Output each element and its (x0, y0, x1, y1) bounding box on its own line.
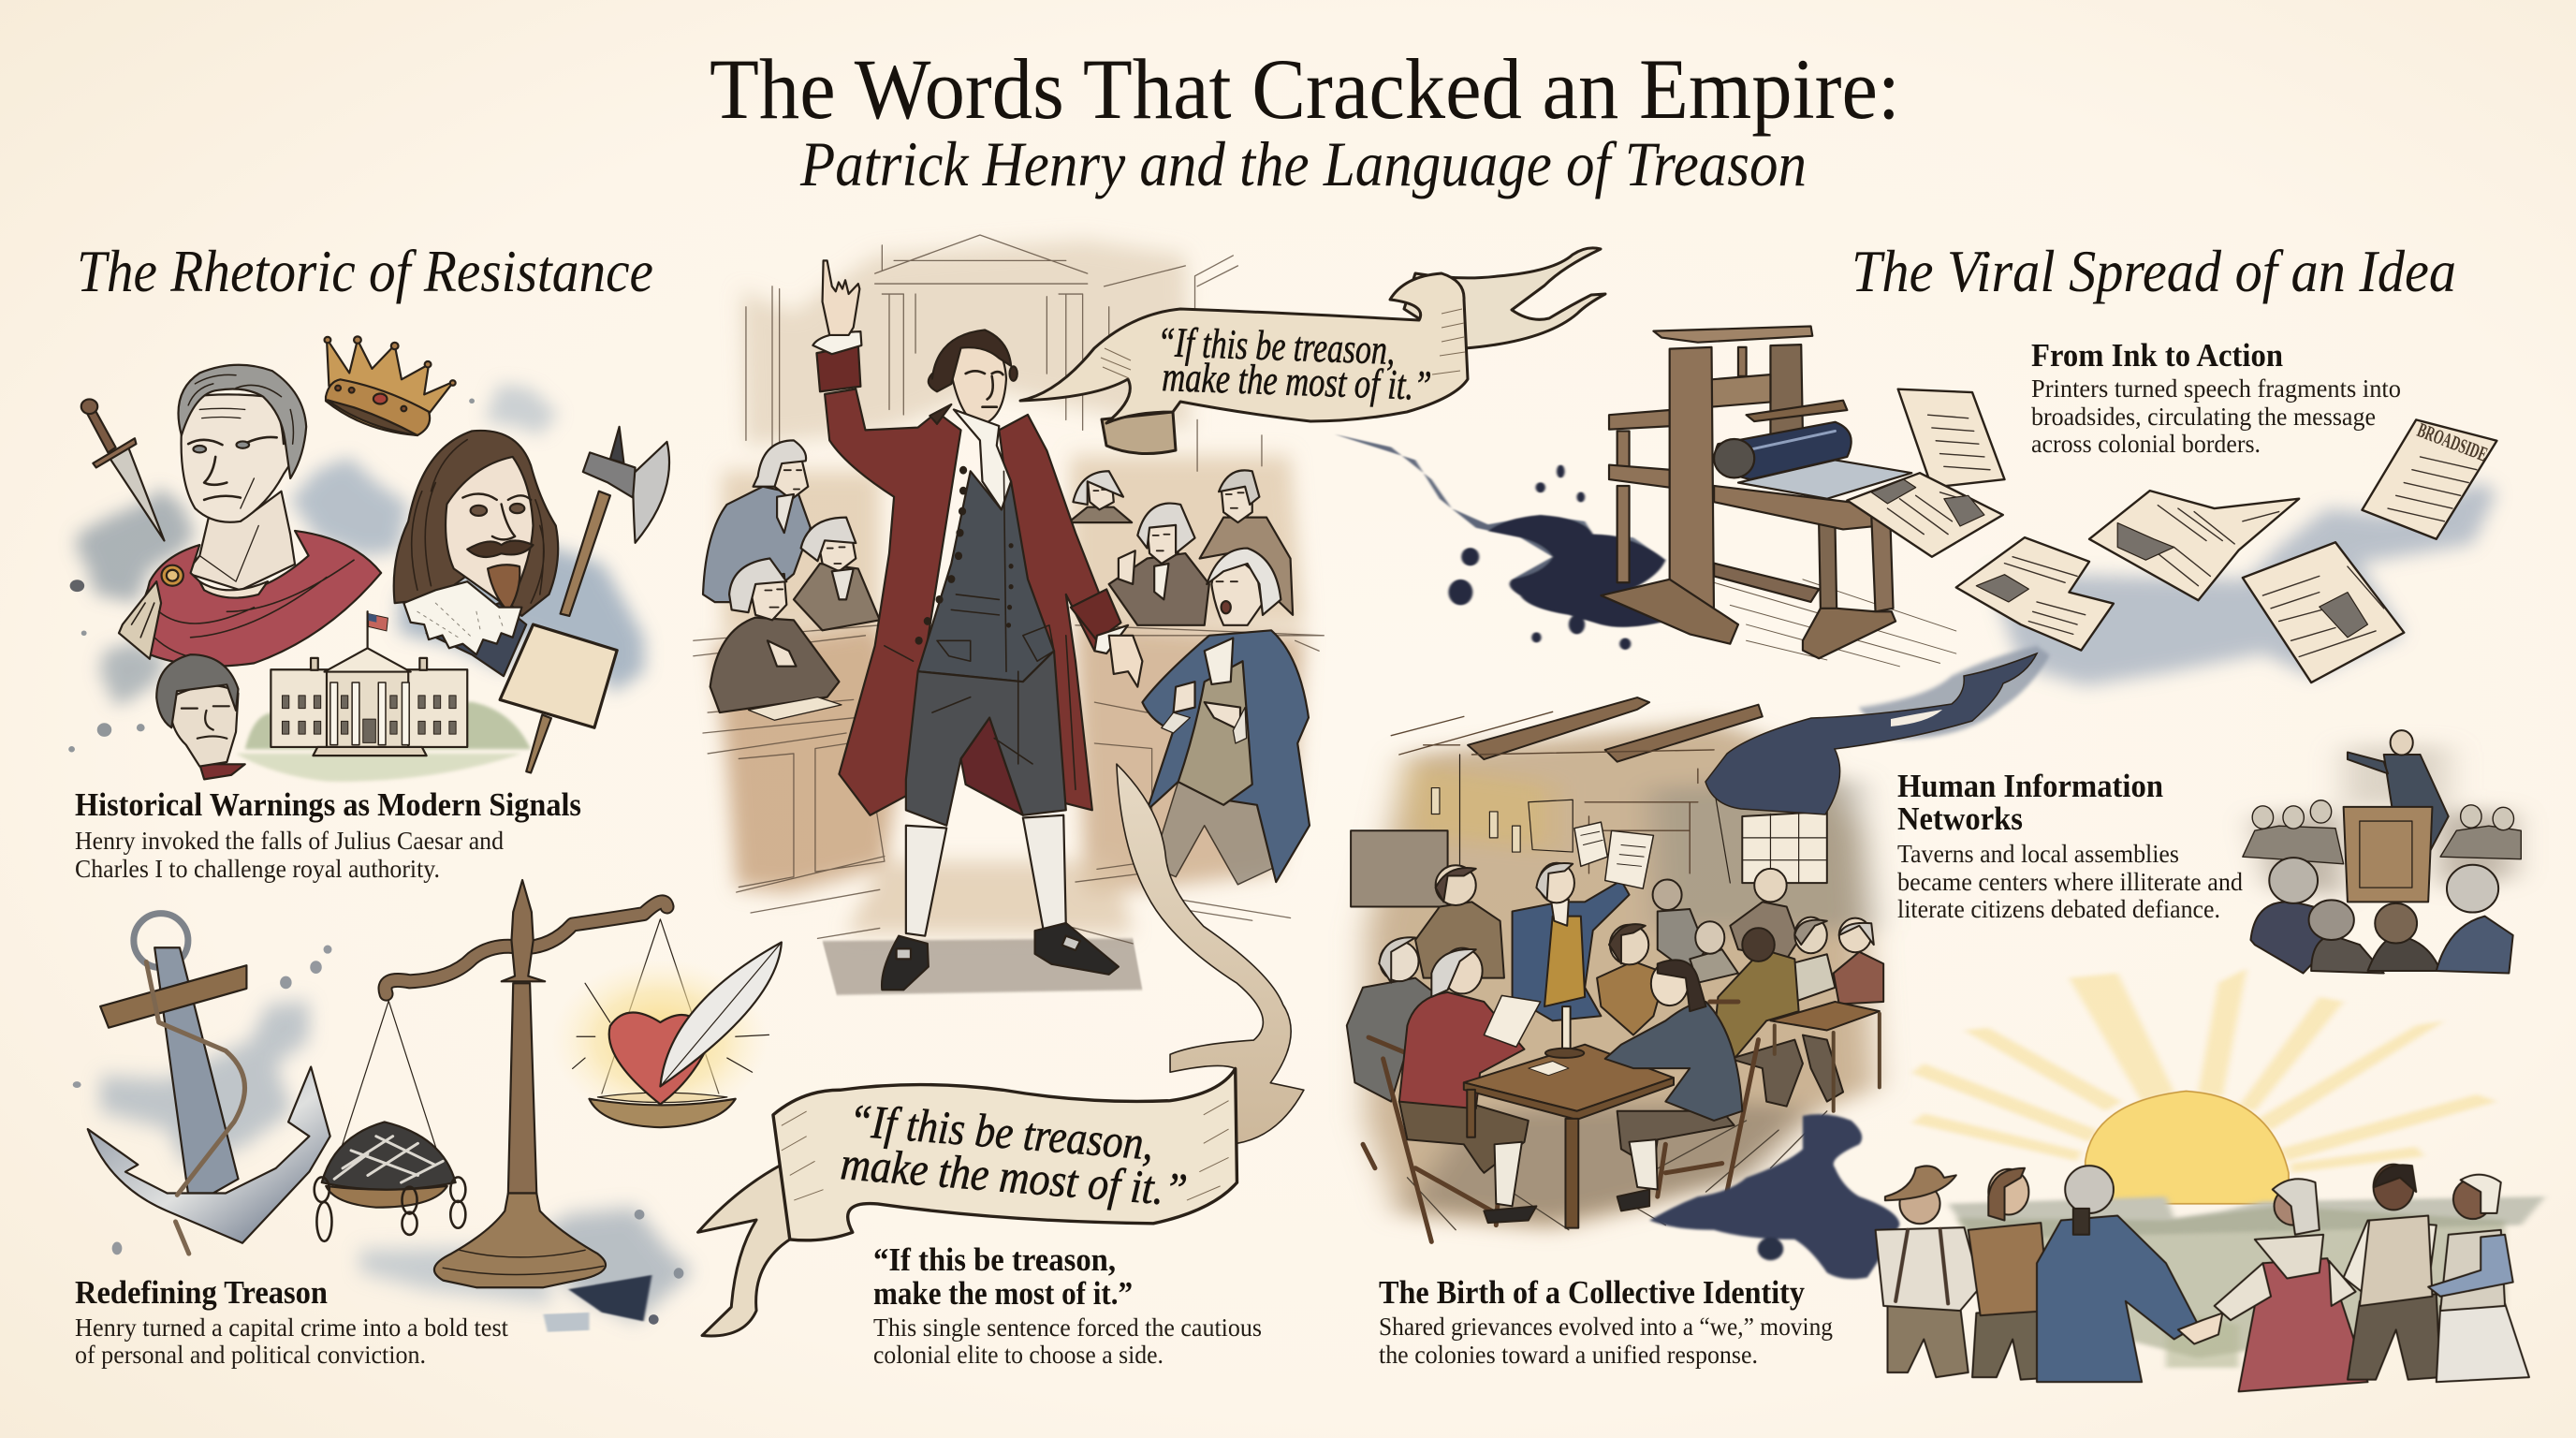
illustration: assembly orator (2243, 730, 2521, 974)
banner text: make the most of it.” (1162, 353, 1432, 409)
icon: balance scale (315, 880, 782, 1287)
body text: Henry invoked the falls of Julius Caesar and (75, 827, 504, 855)
icon: white house (271, 611, 467, 756)
panel: the rhetoric of resistance (68, 239, 782, 1369)
man in blue coat (2037, 1166, 2198, 1382)
icon: dagger (81, 399, 164, 541)
illustration: patrick henry in the courtroom (694, 235, 1324, 995)
trailing ribbon from the speech scene (1117, 764, 1304, 1143)
figure: seated man in grey coat (1484, 960, 1759, 1223)
icon: executioner axe (561, 427, 669, 616)
body text: Henry turned a capital crime into a bold test (75, 1313, 508, 1342)
text block: the quote and its effect (873, 1241, 1262, 1369)
text block: historical warnings as modern signals (75, 786, 581, 883)
ink pool beneath tavern (1649, 1114, 1899, 1279)
subheading: Human Information (1897, 768, 2163, 804)
banner hatching (1101, 309, 1465, 378)
icon: blank protest placard (500, 624, 617, 772)
body text: literate citizens debated defiance. (1897, 895, 2220, 923)
body text: colonial elite to choose a side. (873, 1341, 1164, 1369)
orator at lectern (2344, 730, 2449, 902)
body text: Taverns and local assemblies (1897, 840, 2179, 868)
icon: heart and quill on right pan (551, 943, 782, 1127)
banner back curl (1102, 412, 1176, 454)
body text: This single sentence forced the cautious (873, 1313, 1262, 1342)
ribbon body (773, 1068, 1237, 1240)
illustration: printing press and broadsides (1335, 326, 2496, 685)
body text: Printers turned speech fragments into (2031, 374, 2401, 403)
text block: the birth of a collective identity (1379, 1274, 1833, 1369)
icon: wooden printing press (1601, 326, 1911, 658)
subheading: Historical Warnings as Modern Signals (75, 786, 581, 823)
figure: startled colonist in blue (1142, 549, 1310, 885)
ribbon banner: if this be treason (698, 764, 1304, 1336)
colonists holding hands (1876, 1165, 2529, 1391)
subheading: From Ink to Action (2031, 337, 2283, 374)
subheading: The Birth of a Collective Identity (1379, 1274, 1805, 1311)
tavern room (1351, 697, 1876, 1230)
subheading: “If this be treason, (873, 1241, 1116, 1278)
assembly audience (2243, 800, 2521, 974)
floor hatching (1714, 580, 1956, 667)
icon: chains on left pan (315, 1122, 465, 1241)
spectators right (1068, 470, 1293, 625)
banner text: “If this be treason, (1157, 318, 1396, 374)
banner text (1157, 318, 1432, 409)
subtitle: Patrick Henry and the Language of Treason (799, 128, 1807, 199)
ink splatter dots (68, 399, 475, 752)
icon: crown (325, 336, 456, 435)
figure: seated man in red coat (1363, 948, 1541, 1241)
body text: of personal and political conviction. (75, 1341, 426, 1369)
subheading: make the most of it.” (873, 1275, 1133, 1312)
courtroom background (694, 235, 1324, 995)
ribbon quotation: “If this be treason, (847, 1093, 1156, 1170)
text block: human information networks (1897, 768, 2243, 923)
panel: patrick henry speech scene (694, 235, 1605, 995)
main title: The Words That Cracked an Empire: (710, 41, 1900, 137)
illustration: sunrise over united colonists (1876, 968, 2545, 1391)
body text: became centers where illiterate and (1897, 868, 2243, 896)
man in brown vest (1969, 1168, 2057, 1380)
figure: patrick henry (812, 260, 1142, 990)
figure: standing speaker holding broadside (1513, 822, 1653, 1020)
panel: quote ribbon and pivotal sentence (698, 764, 1304, 1369)
woman in blue and white (2428, 1175, 2529, 1382)
illustration: colonial tavern debate (1347, 697, 1883, 1241)
icon: flying broadsides (1847, 389, 2496, 682)
banner main ribbon (1020, 273, 1468, 423)
ribbon quotation (839, 1093, 1189, 1216)
ribbon quotation: make the most of it.” (839, 1137, 1189, 1216)
text block: redefining treason (75, 1274, 508, 1369)
body text: across colonial borders. (2031, 430, 2261, 458)
farmer with hat (1876, 1166, 1981, 1377)
background patrons (1347, 865, 1883, 1111)
body text: the colonies toward a unified response. (1379, 1341, 1758, 1369)
body text: Charles I to challenge royal authority. (75, 855, 440, 883)
label on broadside: BROADSIDE (2414, 418, 2491, 466)
section heading: viral spread: The Viral Spread of an Idea (1852, 239, 2456, 304)
section heading: rhetoric: The Rhetoric of Resistance (77, 239, 653, 304)
illustration: anchor and scales of justice (73, 880, 782, 1332)
illustration: historical warnings montage (68, 336, 669, 782)
ribbon left tail (698, 1165, 790, 1336)
joined hands (2178, 1313, 2222, 1344)
body text: broadsides, circulating the message (2031, 403, 2376, 431)
ink droplets (73, 946, 683, 1325)
subheading: Redefining Treason (75, 1274, 328, 1311)
ribbon hatching (782, 1101, 1229, 1200)
icon: anchor (88, 914, 330, 1254)
portrait: charles I (394, 431, 558, 676)
spectators left (703, 440, 880, 720)
text block: from ink to action (2031, 337, 2401, 458)
title block (710, 41, 1900, 199)
portrait: julius caesar (119, 365, 381, 666)
ink stream connecting press to tavern (1705, 646, 2050, 814)
icon: small roman bust (156, 654, 245, 779)
speech banner: if this be treason (1020, 248, 1605, 454)
panel: the viral spread of an idea (1335, 239, 2545, 1391)
man in cream vest (2344, 1165, 2440, 1380)
subheading: Networks (1897, 800, 2023, 837)
banner tails (1404, 248, 1605, 348)
body text: Shared grievances evolved into a “we,” moving (1379, 1313, 1833, 1341)
landscape (1948, 1196, 2545, 1368)
ink spill (1335, 434, 1665, 650)
sun and rays (1911, 968, 2496, 1204)
icon: main tavern table (1464, 1006, 1674, 1228)
woman in red dress (2215, 1179, 2367, 1391)
